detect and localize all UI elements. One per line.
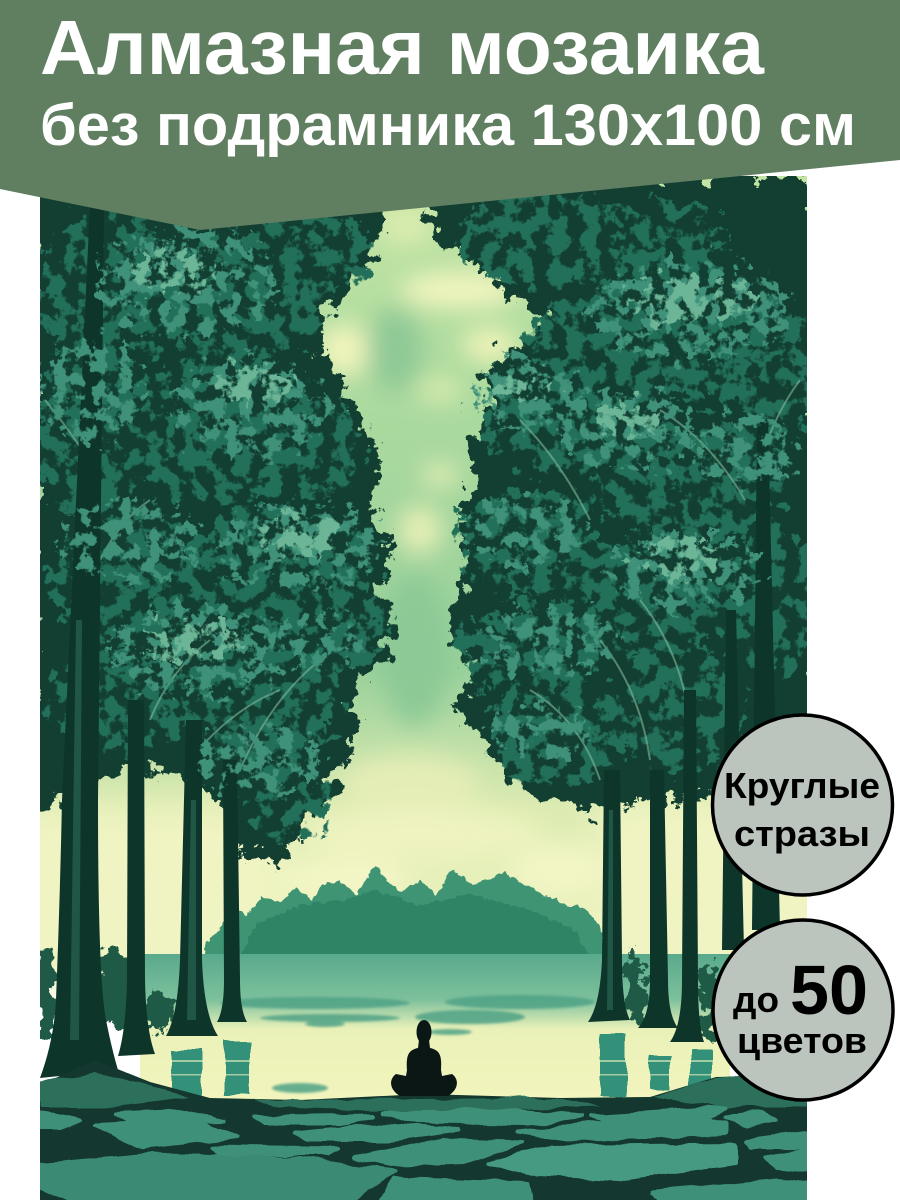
shoreline bushes bbox=[34, 942, 726, 1045]
header banner bbox=[0, 0, 900, 230]
painting: forest lake bbox=[10, 176, 840, 1200]
badge: up to 50 colours bbox=[713, 920, 893, 1100]
badge: round rhinestones bbox=[712, 715, 892, 895]
stones bbox=[40, 1107, 807, 1200]
title line 1: Алмазная мозаика bbox=[40, 5, 765, 91]
badge: up to 50 colours: до bbox=[733, 979, 779, 1020]
badge: round rhinestones: стразы bbox=[734, 813, 870, 854]
trunk highlights bbox=[70, 620, 613, 1040]
badge: up to 50 colours: 50 bbox=[790, 951, 868, 1029]
foreground leaves bbox=[35, 225, 800, 795]
lake water bbox=[140, 954, 730, 1104]
stone ground bbox=[40, 1060, 807, 1200]
tree trunks bbox=[40, 205, 780, 1078]
tree branches bbox=[45, 380, 800, 780]
meditating figure silhouette bbox=[391, 1020, 457, 1096]
mossy banks bbox=[40, 1073, 807, 1112]
badge: round rhinestones: Круглые bbox=[724, 765, 880, 806]
left tree canopy base bbox=[30, 176, 395, 858]
sky with clouds bbox=[10, 176, 840, 990]
badge: up to 50 colours: цветов bbox=[737, 1020, 867, 1061]
right tree canopy base bbox=[430, 176, 820, 812]
distant tree line bbox=[205, 866, 605, 958]
title line 2: без подрамника 130х100 см bbox=[40, 93, 856, 158]
